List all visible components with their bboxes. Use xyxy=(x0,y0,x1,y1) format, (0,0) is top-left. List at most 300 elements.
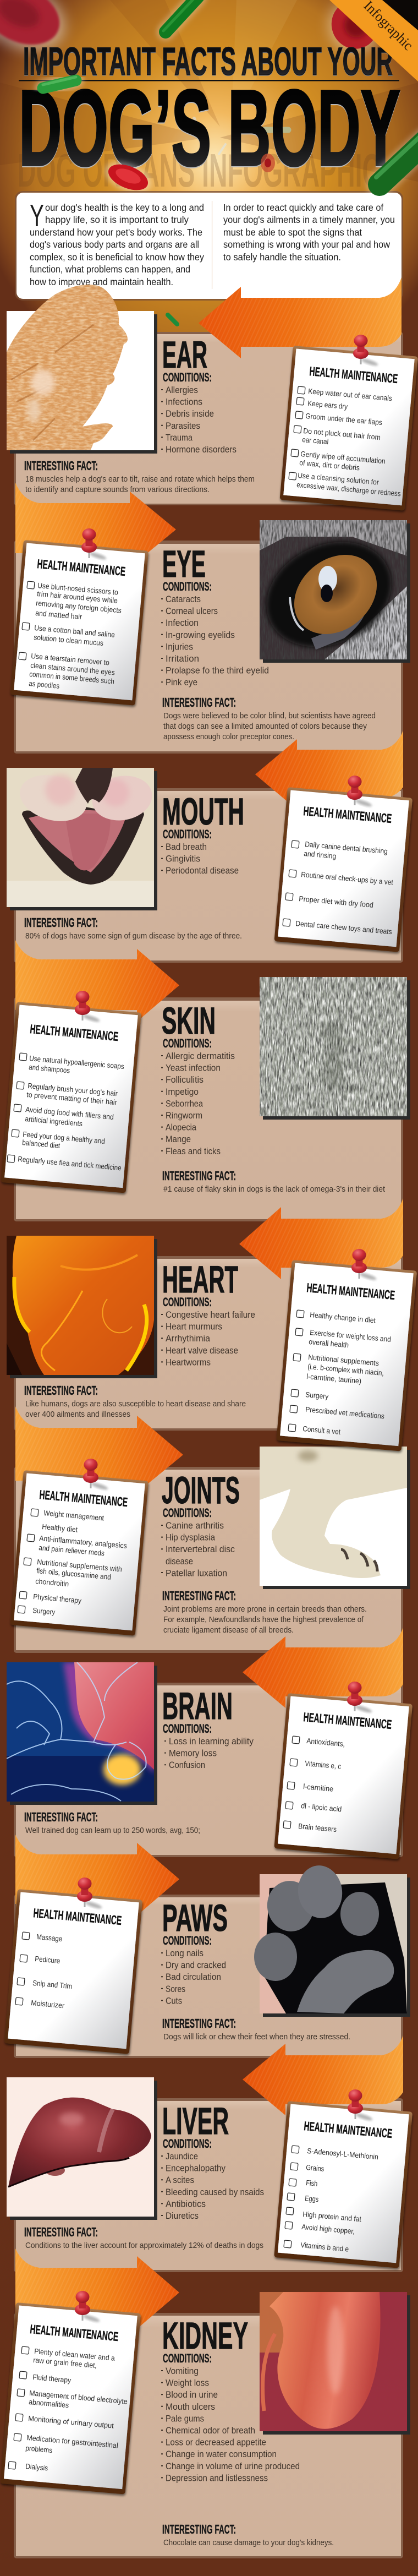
conditions list: Gingivitis xyxy=(166,854,200,864)
checklist: (i.e. b-complex with niacin, xyxy=(307,1362,384,1377)
conditions list: Arrhythimia xyxy=(166,1333,211,1344)
section text: kidney xyxy=(162,2315,334,2547)
conditions label: CONDITIONS: xyxy=(163,2351,212,2365)
photo: paws xyxy=(254,1863,410,2017)
interesting fact: apossess enough color preceptor cones. xyxy=(163,732,294,741)
photo: liver xyxy=(7,2077,157,2220)
checklist: Dental care chew toys and treats xyxy=(295,919,393,936)
conditions label: CONDITIONS: xyxy=(163,1036,212,1050)
intro text: right column: must be able to spot the signs that xyxy=(223,227,362,238)
conditions list: Heartworms xyxy=(166,1357,211,1367)
panel: joints xyxy=(14,1467,403,1653)
checklist: l-carnitine xyxy=(303,1782,334,1793)
conditions list: disease xyxy=(166,1556,193,1567)
blood cell: top right xyxy=(324,0,385,56)
note: ear health maintenance xyxy=(280,335,418,511)
intro text: left column: understand how your pet's body works. The xyxy=(30,227,202,238)
heading: skin: SKIN xyxy=(162,1000,216,1042)
conditions list: Intervertebral disc xyxy=(166,1544,235,1554)
conditions list: Folliculitis xyxy=(166,1074,204,1085)
intro text: left column: how to improve and maintain health. xyxy=(30,276,173,287)
heading: kidney: KIDNEY xyxy=(162,2315,248,2357)
checklist: Plenty of clean water and a xyxy=(34,2347,116,2362)
checklist xyxy=(8,2346,128,2473)
checklist: Vitamins e, c xyxy=(305,1759,342,1771)
arrow: paws to liver xyxy=(243,2035,403,2115)
heading: heart: HEART xyxy=(162,1258,238,1301)
checklist: and pain reliever meds xyxy=(38,1543,105,1557)
checklist xyxy=(15,1932,73,2010)
section text: liver xyxy=(24,2100,264,2250)
checklist: Medication for gastrointestinal xyxy=(26,2433,118,2450)
section text: brain xyxy=(24,1685,254,1835)
checklist: problems xyxy=(25,2444,53,2454)
conditions list: Cataracts xyxy=(166,594,201,604)
checklist: Pedicure xyxy=(35,1955,61,1965)
photo: ear xyxy=(7,283,157,454)
note: paws health maintenance xyxy=(4,1878,142,2054)
ribbon: infographic xyxy=(329,0,418,81)
conditions list: Bad circulation xyxy=(166,1972,221,1982)
conditions list: Bad breath xyxy=(166,842,207,852)
checklist: Feed your dog a healthy and xyxy=(23,1130,105,1145)
conditions list: Depression and listlessness xyxy=(166,2473,268,2483)
checklist: Do not pluck out hair from xyxy=(303,427,381,441)
panel: mouth xyxy=(14,788,403,963)
checklist: dl - lipoic acid xyxy=(301,1802,342,1813)
intro text: left column: function, what problems can happen, and xyxy=(30,264,190,275)
intro text: right column: your dog's ailments in a timely manner, you xyxy=(223,214,395,225)
conditions list: Infection xyxy=(166,618,199,628)
conditions list: Yeast infection xyxy=(166,1063,221,1073)
checklist: Snip and Trim xyxy=(32,1979,73,1990)
interesting fact: Conditions to the liver account for approximately 12% of deaths in dogs xyxy=(25,2241,263,2250)
note: eye health maintenance xyxy=(10,528,148,706)
arrow: ear to eye xyxy=(15,483,176,567)
checklist: fish oils, glucosamine and xyxy=(36,1567,112,1581)
checklist: Use natural hypoallergenic soaps xyxy=(29,1054,125,1071)
conditions list: Chemical odor of breath xyxy=(166,2425,255,2436)
conditions list: Congestive heart failure xyxy=(166,1309,255,1320)
panel: heart xyxy=(14,1256,403,1431)
section text: joints xyxy=(162,1469,367,1635)
checklist: Anti-inflammatory, analgesics xyxy=(39,1534,128,1550)
conditions list: In-growing eyelids xyxy=(166,630,235,640)
note: kidney health maintenance xyxy=(0,2291,141,2495)
arrow: brain to paws xyxy=(15,1835,179,1915)
interesting fact: INTERESTING FACT: xyxy=(24,1810,98,1824)
conditions list: Periodontal disease xyxy=(166,865,239,876)
heading: eye: EYE xyxy=(162,543,206,585)
icon: red push pin xyxy=(348,2089,373,2122)
checklist: Use blunt-nosed scissors to xyxy=(37,581,118,597)
interesting fact: INTERESTING FACT: xyxy=(162,1589,236,1603)
conditions list: Hip dysplasia xyxy=(166,1532,215,1543)
conditions list: Long nails xyxy=(166,1948,204,1958)
note heading: HEALTH MAINTENANCE xyxy=(30,2322,119,2344)
checklist: Use a cotton ball and saline xyxy=(34,624,115,639)
photo: joints xyxy=(260,1447,410,1589)
checklist: Use a tearstain remover to xyxy=(31,652,110,667)
interesting fact: For example, Newfoundlands have the highest prevalence of xyxy=(163,1615,364,1624)
note heading: HEALTH MAINTENANCE xyxy=(33,1906,122,1928)
checklist: Grains xyxy=(306,2163,324,2173)
checklist xyxy=(288,1310,391,1436)
conditions list xyxy=(162,1520,235,1578)
panel: paws xyxy=(14,1895,403,2058)
conditions list: Ringworm xyxy=(166,1110,202,1121)
checklist: solution to clean mucus xyxy=(34,633,104,647)
interesting fact: Dogs will lick or chew their feet when they are stressed. xyxy=(163,2032,350,2042)
checklist: Physical therapy xyxy=(33,1592,82,1605)
conditions list: Debris inside xyxy=(166,408,214,419)
heading: mouth: MOUTH xyxy=(162,790,244,833)
arrow: joints to brain xyxy=(243,1628,403,1708)
checklist: Massage xyxy=(36,1933,63,1943)
checklist: Healthy diet xyxy=(42,1522,78,1534)
conditions list: Weight loss xyxy=(166,2378,209,2388)
icon: red push pin xyxy=(347,1682,372,1714)
conditions list: Prolapse fo the third eyelid xyxy=(166,665,269,676)
conditions list: Encephalopathy xyxy=(166,2163,226,2174)
checklist: Consult a vet xyxy=(302,1425,341,1436)
conditions list: Cuts xyxy=(166,1995,182,2006)
conditions list: Allergies xyxy=(166,385,198,395)
conditions list: Mouth ulcers xyxy=(166,2402,215,2412)
conditions list: Infections xyxy=(166,397,202,407)
checklist: Antioxidants, xyxy=(306,1737,345,1748)
interesting fact xyxy=(24,459,255,494)
interesting fact xyxy=(162,1169,386,1194)
conditions list: Pink eye xyxy=(166,677,197,687)
note: skin health maintenance xyxy=(1,991,141,1193)
checklist: Routine oral check-ups by a vet xyxy=(301,870,394,887)
checklist: Weight management xyxy=(43,1509,105,1522)
arrow: eye to mouth xyxy=(255,730,403,810)
photo: kidney xyxy=(260,2292,410,2435)
checklist: Brain teasers xyxy=(298,1822,337,1833)
photo: eye xyxy=(249,520,410,667)
interesting fact: INTERESTING FACT: xyxy=(24,1383,98,1398)
conditions list: Hormone disorders xyxy=(166,444,237,455)
checklist: Nutritional supplements with xyxy=(37,1558,122,1573)
checklist: to prevent matting of their hair xyxy=(26,1090,118,1106)
checklist: Avoid dog food with fillers and xyxy=(25,1105,114,1121)
checklist: removing any foreign objects xyxy=(36,599,122,615)
conditions list: Parasites xyxy=(166,421,200,431)
photo: skin xyxy=(260,977,410,1120)
checklist: Exercise for weight loss and xyxy=(310,1328,391,1344)
blood cell: top left xyxy=(0,0,76,63)
conditions label: CONDITIONS: xyxy=(163,370,212,384)
conditions list: Blood in urine xyxy=(166,2389,218,2400)
interesting fact: cruciate ligament disease of all breeds. xyxy=(163,1625,294,1635)
interesting fact: INTERESTING FACT: xyxy=(24,2225,98,2239)
checklist xyxy=(283,1736,345,1833)
conditions list xyxy=(162,594,269,687)
arrow: heart to joints xyxy=(15,1406,183,1493)
heading: ear: EAR xyxy=(162,334,207,376)
conditions list: Sores xyxy=(166,1984,185,1994)
conditions list: Fleas and ticks xyxy=(166,1146,221,1156)
checklist: Nutritional supplements xyxy=(308,1353,380,1367)
black corner behind ribbon xyxy=(382,0,418,31)
checklist: raw or grain free diet, xyxy=(33,2356,97,2370)
conditions list xyxy=(162,1948,226,2006)
conditions list: Pale gums xyxy=(166,2413,204,2424)
icon: red push pin xyxy=(353,335,378,367)
conditions list: Bleeding caused by nsaids xyxy=(166,2187,264,2197)
panel: skin xyxy=(14,997,403,1221)
conditions list: Corneal ulcers xyxy=(166,606,218,616)
checklist: Fluid therapy xyxy=(32,2373,72,2384)
checklist: Groom under the ear flaps xyxy=(305,412,383,427)
interesting fact xyxy=(24,2225,263,2250)
checklist: of wax, dirt or debris xyxy=(299,459,360,472)
interesting fact: that dogs can see a limited amounted of colors because they xyxy=(163,722,367,731)
icon: red push pin xyxy=(75,2291,100,2323)
intro card xyxy=(15,191,403,301)
interesting fact: INTERESTING FACT: xyxy=(162,2522,236,2536)
checklist: Surgery xyxy=(305,1390,329,1401)
panel: liver xyxy=(14,2098,403,2272)
checklist: Proper diet with dry food xyxy=(299,894,374,909)
interesting fact: Like humans, dogs are also susceptible to heart disease and share xyxy=(25,1399,246,1409)
interesting fact: #1 cause of flaky skin in dogs is the lack of omega-3's in their diet xyxy=(163,1185,386,1194)
checklist: and matted hair xyxy=(35,609,82,621)
conditions label: CONDITIONS: xyxy=(163,1506,212,1520)
section text: eye xyxy=(162,543,376,741)
note: joints health maintenance xyxy=(10,1459,148,1636)
panel: kidney xyxy=(14,2313,403,2558)
arrow: liver to kidney xyxy=(15,2248,179,2329)
conditions list xyxy=(162,842,239,876)
interesting fact: to identify and capture sounds from various directions. xyxy=(25,485,210,494)
conditions list: Heart murmurs xyxy=(166,1322,222,1332)
note heading: HEALTH MAINTENANCE xyxy=(39,1487,128,1509)
conditions label: CONDITIONS: xyxy=(163,2137,212,2151)
section text: ear xyxy=(24,334,255,494)
photo: mouth xyxy=(7,768,157,910)
interesting fact: Dogs were believed to be color blind, but scientists have agreed xyxy=(163,711,376,721)
interesting fact: Joint problems are more prone in certain breeds than others. xyxy=(163,1604,367,1614)
note heading: HEALTH MAINTENANCE xyxy=(30,1022,119,1044)
conditions list: Allergic dermatitis xyxy=(166,1051,235,1061)
arrow: intro to ear xyxy=(199,277,402,358)
interesting fact xyxy=(24,1810,200,1835)
panel: ear xyxy=(14,332,403,505)
heading: liver: LIVER xyxy=(162,2100,229,2142)
checklist: ear canal xyxy=(302,435,329,446)
heading: paws: PAWS xyxy=(162,1897,228,1939)
intro text: right column: something is wrong with your pal and how xyxy=(223,239,390,250)
conditions list: Dry and cracked xyxy=(166,1960,226,1971)
checklist: common in some breeds such xyxy=(29,670,114,685)
panel: brain xyxy=(14,1683,403,1857)
checklist: Fish xyxy=(306,2179,318,2188)
bacteria capsule: small green xyxy=(168,315,177,324)
checklist: Keep ears dry xyxy=(307,399,348,411)
conditions list: Antibiotics xyxy=(166,2198,206,2209)
interesting fact xyxy=(24,1383,246,1419)
checklist: Healthy change in diet xyxy=(310,1311,376,1324)
section text: heart xyxy=(24,1258,255,1419)
conditions list: Confusion xyxy=(169,1760,205,1770)
checklist xyxy=(18,1509,128,1617)
checklist: overall health xyxy=(309,1338,349,1349)
conditions list: Alopecia xyxy=(166,1122,196,1133)
conditions list: Seborrhea xyxy=(166,1098,203,1109)
interesting fact: INTERESTING FACT: xyxy=(24,915,98,930)
note: brain health maintenance xyxy=(274,1682,413,1859)
icon: red push pin xyxy=(75,991,100,1023)
arrow: skin to heart xyxy=(239,1198,403,1279)
conditions list xyxy=(162,1309,255,1367)
bacteria capsule: top centre xyxy=(163,0,198,32)
photo: brain xyxy=(7,1662,157,1805)
conditions list: Irritation xyxy=(166,653,199,664)
checklist xyxy=(289,386,402,498)
checklist: Regularly brush your dog's hair xyxy=(28,1082,118,1098)
conditions label: CONDITIONS: xyxy=(163,1934,212,1947)
title rule xyxy=(19,80,399,81)
conditions list: Loss or decreased appetite xyxy=(166,2437,266,2448)
icon: red push pin xyxy=(77,1878,102,1910)
interesting fact: Well trained dog can learn up to 250 words, avg, 150; xyxy=(25,1826,200,1835)
intro text: right column: to safely handle the situation. xyxy=(223,252,341,263)
icon: red push pin xyxy=(351,1249,377,1281)
interesting fact xyxy=(162,1589,367,1635)
conditions list: Mange xyxy=(166,1134,191,1144)
heading: joints: JOINTS xyxy=(162,1469,240,1511)
interesting fact: INTERESTING FACT: xyxy=(162,695,236,710)
checklist: High protein and fat xyxy=(302,2210,362,2223)
intro text: left column: dog's various body parts and organs are all xyxy=(30,239,199,250)
interesting fact: 18 muscles help a dog's ear to tilt, raise and rotate which helps them xyxy=(25,474,255,484)
conditions label: CONDITIONS: xyxy=(163,1295,212,1309)
note: heart health maintenance xyxy=(276,1249,417,1451)
interesting fact xyxy=(162,2016,350,2042)
interesting fact: INTERESTING FACT: xyxy=(162,1169,236,1183)
pale capsules behind title xyxy=(194,118,288,154)
interesting fact xyxy=(24,915,242,941)
interesting fact xyxy=(162,2522,334,2547)
bacteria capsule: over title xyxy=(43,77,76,88)
checklist: Surgery xyxy=(32,1606,56,1617)
conditions list: Jaundice xyxy=(166,2151,198,2162)
checklist: Moisturizer xyxy=(31,1999,65,2010)
conditions list: Change in volume of urine produced xyxy=(166,2461,300,2471)
checklist: chondroitin xyxy=(35,1577,69,1588)
intro text: right column xyxy=(223,202,395,263)
icon: red push pin xyxy=(81,528,107,561)
interesting fact: over 400 ailments and illnesses xyxy=(25,1410,130,1419)
checklist xyxy=(283,840,394,936)
checklist: balanced diet xyxy=(22,1138,61,1150)
checklist: l-carntine, taurine) xyxy=(306,1372,362,1385)
checklist: Management of blood electrolyte xyxy=(29,2389,128,2406)
conditions label: CONDITIONS: xyxy=(163,580,212,593)
drop cap: Y xyxy=(30,198,44,233)
interesting fact: 80% of dogs have some sign of gum disease by the age of three. xyxy=(25,931,242,941)
intro text: left column: complex, so it is beneficial to know how they xyxy=(30,252,204,263)
checklist: Gently wipe off accumulation xyxy=(300,450,386,465)
conditions label: CONDITIONS: xyxy=(163,827,212,841)
checklist: trim hair around eyes while xyxy=(37,590,118,605)
blood cell: small faint xyxy=(261,154,275,172)
checklist xyxy=(7,1053,125,1172)
conditions list: Canine arthritis xyxy=(166,1520,224,1531)
blood cell: small bright xyxy=(101,156,156,199)
checklist xyxy=(19,581,122,690)
intro text: left column: happy life, so it is important to truly xyxy=(45,214,189,225)
checklist: Regularly use flea and tick medicine xyxy=(18,1155,122,1172)
checklist xyxy=(284,2146,379,2253)
checklist: Use a cleansing solution for xyxy=(298,471,380,487)
section text: skin xyxy=(162,1000,386,1194)
conditions list xyxy=(165,1736,254,1770)
conditions list: Trauma xyxy=(166,432,193,443)
interesting fact: Chocolate can cause damage to your dog's kidneys. xyxy=(163,2538,334,2547)
bacteria capsule: large bottom right xyxy=(376,134,418,184)
conditions list: Patellar luxation xyxy=(166,1568,227,1578)
conditions list xyxy=(162,2366,300,2483)
checklist: as poodles xyxy=(29,679,60,690)
note: mouth health maintenance xyxy=(274,776,413,952)
checklist: abnormalities xyxy=(29,2398,69,2409)
note: liver health maintenance xyxy=(274,2089,413,2268)
icon: red push pin xyxy=(347,776,372,808)
checklist: and rinsing xyxy=(304,849,337,860)
checklist: Eggs xyxy=(305,2194,319,2203)
checklist: excessive wax, discharge or redness xyxy=(296,481,402,498)
checklist: Dialysis xyxy=(25,2462,48,2473)
arrow: mouth to skin xyxy=(15,940,179,1022)
conditions list: Change in water consumption xyxy=(166,2449,277,2459)
checklist: clean stains around the eyes xyxy=(30,661,116,676)
checklist: and shampoos xyxy=(29,1063,70,1075)
checklist: Prescribed vet medications xyxy=(305,1405,385,1421)
photo: heart xyxy=(7,1236,157,1378)
checklist: artificial ingredients xyxy=(25,1115,83,1128)
interesting fact xyxy=(162,695,376,741)
intro text: left column xyxy=(30,202,204,287)
checklist: S-Adenosyl-L-Methionin xyxy=(307,2147,379,2161)
heading: brain: BRAIN xyxy=(162,1685,233,1727)
conditions list: Vomiting xyxy=(166,2366,199,2376)
conditions list: A scites xyxy=(166,2175,194,2185)
checklist: Avoid high copper, xyxy=(301,2223,355,2235)
checklist: Monitoring of urinary output xyxy=(28,2414,114,2430)
conditions list: Heart valve disease xyxy=(166,1345,238,1356)
conditions list: Impetigo xyxy=(166,1087,199,1097)
header golden glow background xyxy=(0,0,418,407)
note heading: HEALTH MAINTENANCE xyxy=(37,556,126,578)
conditions list xyxy=(162,1051,235,1156)
section text: paws xyxy=(162,1897,350,2042)
panel: eye xyxy=(14,541,403,754)
conditions list: Injuries xyxy=(166,641,193,652)
checklist: Vitamins b and e xyxy=(300,2241,349,2253)
intro text: right column: In order to react quickly and take care of xyxy=(223,202,383,213)
conditions list: Loss in learning ability xyxy=(169,1736,254,1747)
conditions list xyxy=(162,2151,264,2221)
checklist: Daily canine dental brushing xyxy=(305,840,388,855)
interesting fact: INTERESTING FACT: xyxy=(162,2016,236,2031)
intro text: left column: our dog's health is the key to a long and xyxy=(45,202,204,213)
icon: red push pin xyxy=(83,1459,108,1491)
conditions label: CONDITIONS: xyxy=(163,1722,212,1735)
